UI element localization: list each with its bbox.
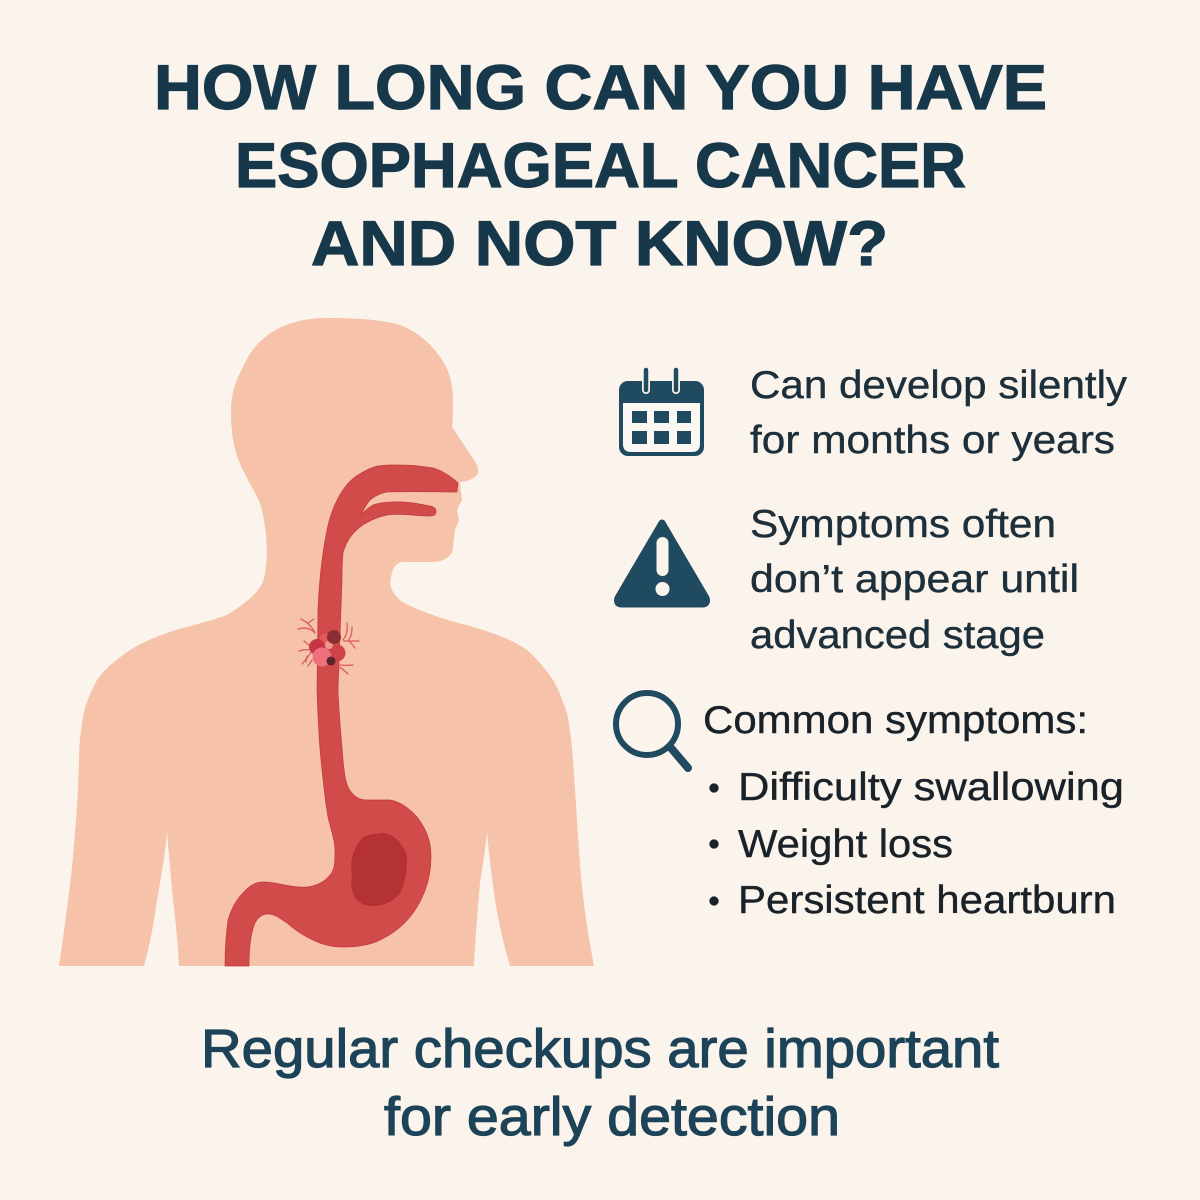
footer message: Regular checkups are important xyxy=(201,1019,999,1079)
symptom list: Weight loss xyxy=(738,823,953,866)
text: develop silently: for months or years xyxy=(750,419,1115,462)
icon: warning triangle xyxy=(618,523,706,604)
text: symptoms appear late xyxy=(750,503,1079,657)
esophagus and mouth xyxy=(225,465,458,966)
text: symptoms appear late: Symptoms often xyxy=(750,503,1056,546)
symptom list: Difficulty swallowing xyxy=(738,766,1124,809)
text: develop silently xyxy=(750,364,1128,462)
title: ESOPHAGEAL CANCER xyxy=(235,131,966,201)
symptom list xyxy=(710,766,1124,922)
footer message: for early detection xyxy=(384,1087,840,1147)
illustration: human body with esophagus and stomach xyxy=(59,318,594,966)
title xyxy=(154,53,1047,279)
text: develop silently: Can develop silently xyxy=(750,364,1128,407)
footer message xyxy=(201,1019,999,1147)
title: HOW LONG CAN YOU HAVE xyxy=(154,53,1047,123)
text: symptoms appear late: don’t appear until xyxy=(750,558,1079,601)
icon: magnifying glass xyxy=(616,693,688,768)
symptom list: Persistent heartburn xyxy=(738,879,1116,922)
icon: calendar xyxy=(619,370,704,456)
title: AND NOT KNOW? xyxy=(311,209,888,279)
text: common symptoms heading: Common symptoms: xyxy=(703,699,1088,742)
esophageal tumor cluster with veins xyxy=(298,619,359,674)
body silhouette xyxy=(59,318,594,966)
stomach tumor xyxy=(351,833,407,906)
text: symptoms appear late: advanced stage xyxy=(750,614,1045,657)
